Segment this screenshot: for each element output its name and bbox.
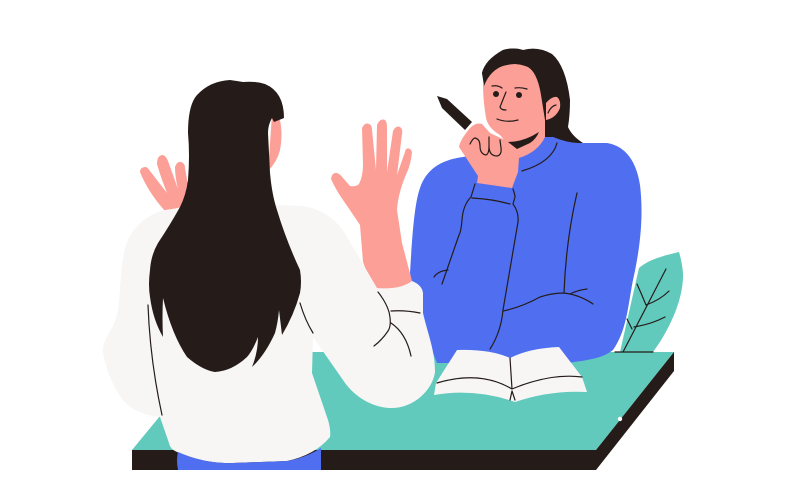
table xyxy=(132,352,674,470)
person: man with pen xyxy=(410,48,642,363)
open book xyxy=(434,347,587,402)
woman long hair xyxy=(149,80,301,372)
man back hair xyxy=(482,48,583,150)
man hand xyxy=(459,124,519,188)
man ear xyxy=(546,97,560,120)
woman right arm and hand xyxy=(331,120,414,300)
man hair fringe xyxy=(482,48,545,100)
man collar shadow xyxy=(508,132,539,149)
icon: plant leaf xyxy=(620,252,683,352)
plant stem and branches xyxy=(615,269,669,352)
table edge xyxy=(132,352,674,470)
man sweater lines xyxy=(434,143,593,349)
woman trousers xyxy=(177,448,321,470)
woman left hand xyxy=(140,155,190,211)
woman sweater lines xyxy=(148,292,420,415)
table dot xyxy=(618,417,622,421)
pen xyxy=(437,96,472,130)
woman sweater xyxy=(103,205,435,463)
man face and neck xyxy=(483,64,545,158)
man sweater xyxy=(410,137,642,363)
woman face xyxy=(268,115,282,171)
table top xyxy=(132,352,674,450)
person: woman seen from behind xyxy=(103,80,435,470)
man face details xyxy=(470,86,556,156)
